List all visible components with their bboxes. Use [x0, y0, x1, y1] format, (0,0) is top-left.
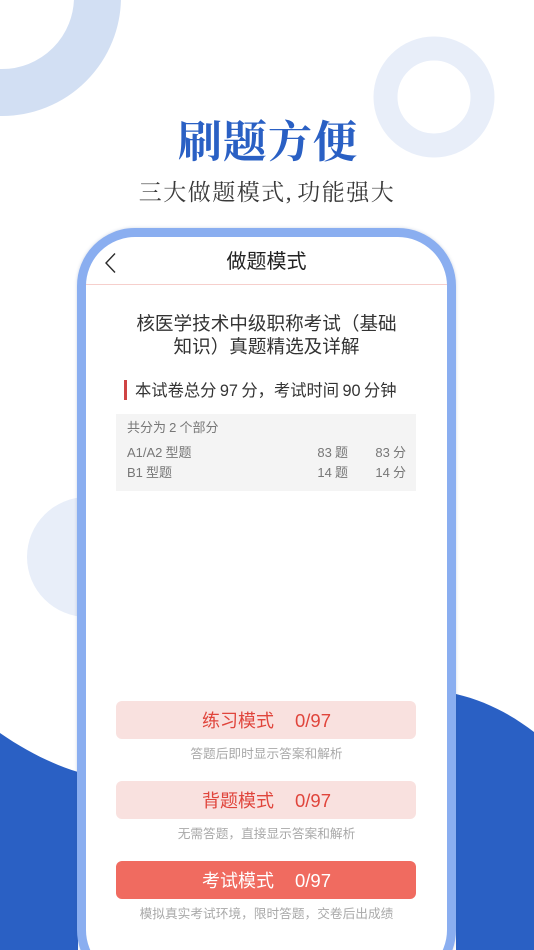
exam summary [124, 380, 397, 400]
button: memorize mode: 0/97 [295, 790, 331, 811]
button: exam mode: 0/97 [295, 870, 331, 891]
button: practice mode: 练习模式 [202, 711, 274, 731]
button: practice mode: 0/97 [295, 710, 331, 731]
summary text: 本试卷总分 97 分，考试时间 90 分钟 [135, 382, 397, 400]
button: exam mode: 考试模式 [202, 871, 274, 891]
button: memorize mode: 背题模式 [202, 791, 274, 811]
exam title: 核医学技术中级职称考试（基础 [136, 313, 397, 334]
exam title [136, 313, 397, 357]
row: B1 [127, 465, 406, 480]
phone frame [77, 228, 456, 950]
note: practice mode: 答题后即时显示答案和解析 [190, 747, 343, 761]
exam title: 知识）真题精选及详解 [174, 336, 359, 357]
header divider [86, 284, 447, 285]
title: 刷题方便 [178, 118, 358, 167]
row: B1: B1 型题 [127, 465, 172, 480]
parts table [116, 414, 416, 491]
row: A1/A2 [127, 445, 406, 460]
row: B1: 14 题 [317, 465, 348, 480]
row: A1/A2: A1/A2 型题 [127, 445, 192, 460]
row: B1: 14 分 [375, 465, 406, 480]
icon: back arrow [105, 253, 116, 273]
subtitle: 三大做题模式, 功能强大 [139, 180, 395, 205]
button: exam mode [116, 861, 416, 899]
note: exam mode: 模拟真实考试环境，限时答题，交卷后出成绩 [140, 907, 393, 921]
row: A1/A2: 83 分 [375, 445, 406, 460]
row: A1/A2: 83 题 [317, 445, 348, 460]
red accent bar [124, 380, 127, 400]
header title: 做题模式 [226, 251, 306, 273]
phone screen content [86, 251, 447, 400]
parts heading: 共分为 2 个部分 [127, 420, 218, 435]
button: practice mode [116, 701, 416, 739]
button: memorize mode [116, 781, 416, 819]
note: memorize mode: 无需答题，直接显示答案和解析 [178, 827, 355, 841]
